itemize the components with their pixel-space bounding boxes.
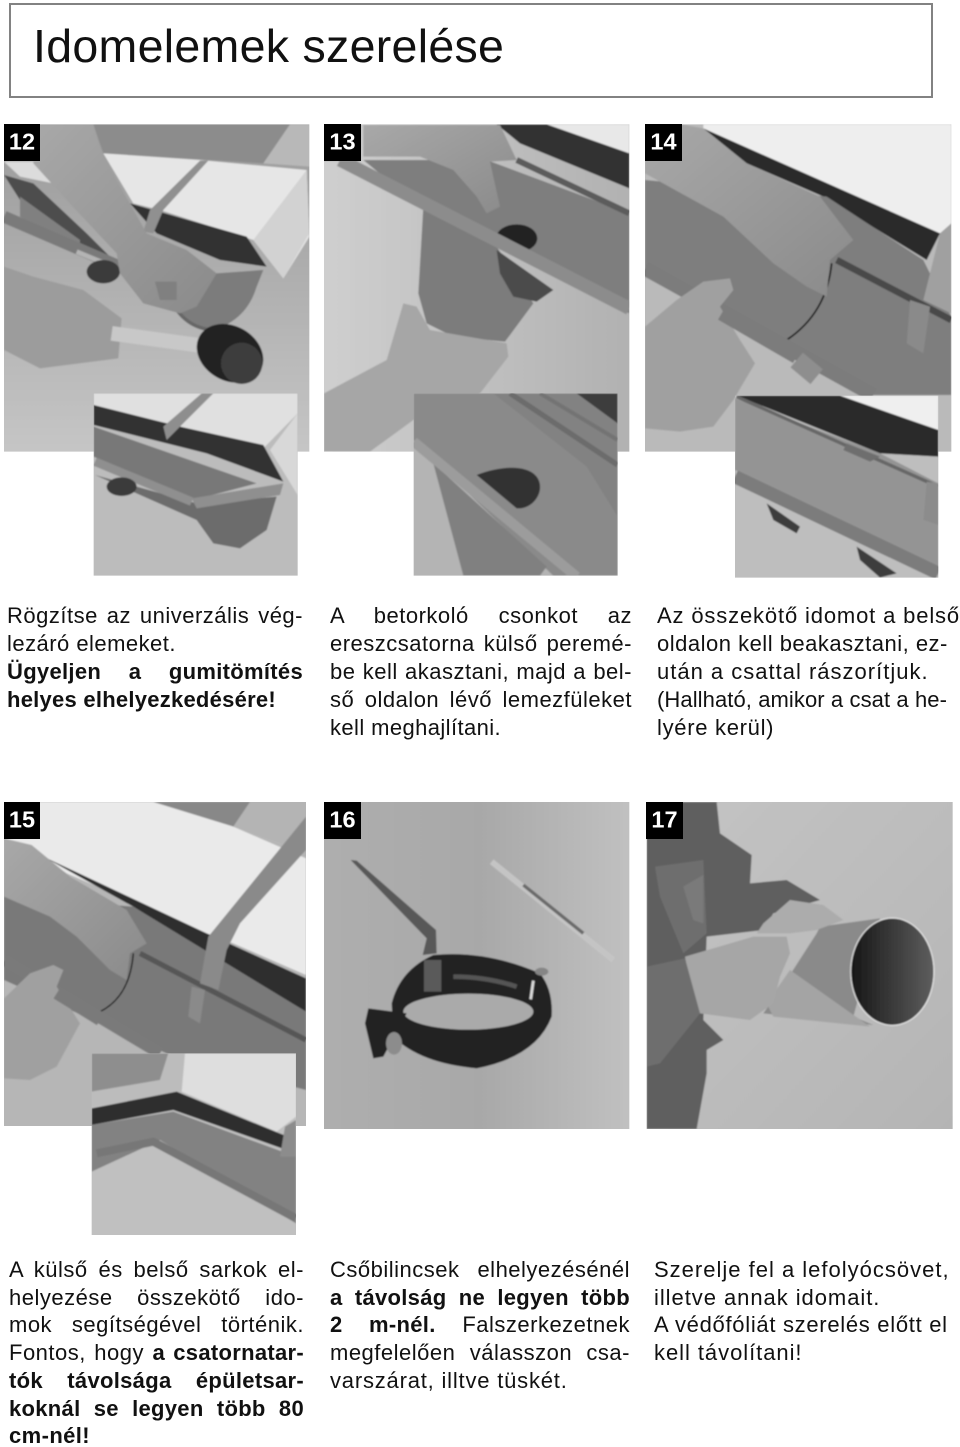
title: Idomelemek szerelése	[33, 20, 504, 72]
text: step 15	[9, 1257, 304, 1447]
badge 12: 12	[9, 128, 35, 154]
text: step 13	[330, 603, 632, 740]
panel 12	[0, 120, 320, 580]
text: step 12: helyes elhelyezkedésére!	[7, 687, 276, 712]
badge 13	[324, 124, 361, 161]
panel 14	[640, 120, 960, 580]
text: step 17: kell távolítani!	[654, 1340, 802, 1365]
text: step 17	[654, 1257, 950, 1365]
inset photo 14: closed coupling	[735, 396, 938, 578]
title box	[9, 3, 933, 98]
inset photo 12: end cap	[94, 394, 298, 576]
text: step 13: be kell akasztani, majd a bel-	[330, 659, 632, 684]
badge 12	[4, 124, 40, 161]
panel 13	[320, 120, 640, 580]
text: step 14: lyére kerül)	[657, 715, 774, 740]
text: step 16: megfelelően válasszon csa-	[330, 1340, 630, 1365]
photo 12: hands and mallet	[4, 124, 310, 452]
text: step 15: A külső és belső sarkok el-	[9, 1257, 304, 1282]
text: step 14: után a csattal rászorítjuk.	[657, 659, 929, 684]
text: step 13: ereszcsatorna külső peremé-	[330, 631, 632, 656]
text: step 16: a távolság ne legyen több	[330, 1285, 630, 1310]
text: step 13: ső oldalon lévő lemezfüleket	[330, 687, 632, 712]
inset photo 15: corner	[92, 1053, 296, 1235]
photo 16: pipe clamp and screw	[324, 802, 630, 1129]
text: step 12: Ügyeljen a gumitömítés	[7, 659, 303, 684]
text: step 15: mok segítségével történik.	[9, 1312, 304, 1337]
badge 16: 16	[329, 806, 356, 832]
badge 17: 17	[651, 806, 678, 832]
text: step 15: koknál se legyen több 80	[9, 1396, 304, 1421]
badge 13: 13	[329, 128, 356, 154]
text: step 15: tók távolsága épületsar-	[9, 1368, 304, 1393]
photo 13: outlet and hands	[324, 124, 630, 452]
photo 15: coupling on full roof edge	[4, 802, 306, 1126]
photo 14: coupling and hands	[645, 124, 952, 452]
text: step 17: illetve annak idomait.	[654, 1285, 880, 1310]
photo 17: removing protective film from pipe	[646, 802, 953, 1129]
badge 16	[324, 802, 361, 839]
badge 17	[646, 802, 683, 839]
text: step 16	[330, 1257, 630, 1393]
badge 15	[4, 802, 40, 839]
text: step 14: (Hallható, amikor a csat a he-	[657, 687, 947, 712]
text: step 13: kell meghajlítani.	[330, 715, 501, 740]
text: step 16: varszárat, illtve tüskét.	[330, 1368, 568, 1393]
panel 17	[640, 800, 960, 1133]
text: step 14	[657, 603, 960, 740]
badge 14	[645, 124, 682, 161]
text: step 12: Rögzítse az univerzális vég-	[7, 603, 303, 628]
inset photo 13: hole detail	[414, 393, 618, 576]
text: step 12	[7, 603, 303, 712]
text: step 13: A betorkoló csonkot az	[330, 603, 632, 628]
text: step 15: helyezése összekötő ido-	[9, 1285, 304, 1310]
text: step 12: lezáró elemeket.	[7, 631, 176, 656]
text: step 17: A védőfóliát szerelés előtt el	[654, 1312, 948, 1337]
badge 15: 15	[9, 806, 35, 832]
text: step 14: Az összekötő idomot a belső	[657, 603, 960, 628]
text: step 15: Fontos, hogy a csatornatar-	[9, 1340, 304, 1365]
text: step 17: Szerelje fel a lefolyócsövet,	[654, 1257, 950, 1282]
panel 16	[320, 800, 640, 1133]
text: step 14: oldalon kell beakasztani, ez-	[657, 631, 948, 656]
text: step 16: Csőbilincsek elhelyezésénél	[330, 1257, 630, 1282]
panel 15	[0, 800, 320, 1240]
badge 14: 14	[650, 128, 677, 154]
text: step 16: 2 m-nél. Falszerkezetnek	[330, 1312, 630, 1337]
